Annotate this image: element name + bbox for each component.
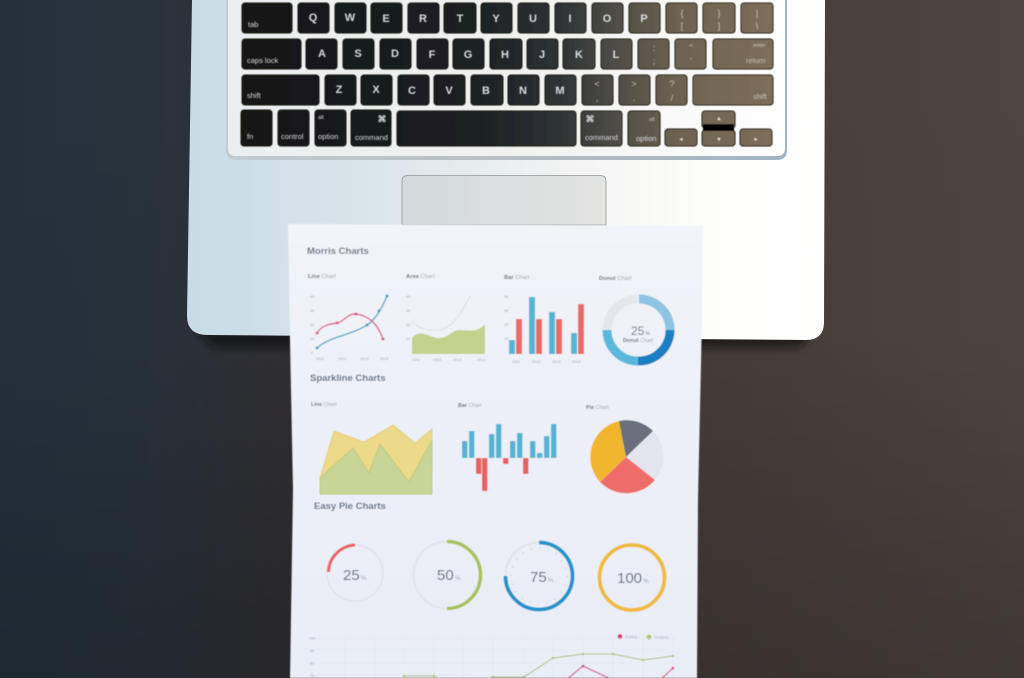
keyboard legends: I: [568, 13, 572, 25]
panel: morris donut chart: [599, 276, 670, 361]
keyboard legends: option: [318, 132, 338, 141]
keyboard legends: J: [539, 49, 545, 61]
keyboard legends: fn: [247, 132, 253, 141]
panel: morris line chart: 2012: [338, 357, 346, 361]
keyboard well edge: [226, 0, 787, 160]
keyboard legends: >: [631, 79, 637, 89]
laptop base: [187, 0, 825, 348]
panel: morris bar chart: 2013: [552, 360, 560, 364]
panel: morris line chart: Line Chart: [308, 274, 336, 280]
panel: morris donut chart: Donut Chart: [599, 276, 632, 282]
panel: morris area chart: 2012: [433, 358, 441, 362]
keyboard legends: S: [354, 48, 362, 60]
keyboard legends: ?: [669, 79, 675, 89]
panel: morris line chart: 0: [311, 351, 313, 355]
gauge: 50 percent: [414, 542, 480, 608]
panel: morris area chart: 20: [406, 323, 410, 327]
panel: morris bar chart: Bar Chart: [504, 275, 530, 281]
keyboard legends: Q: [309, 12, 318, 24]
panel: morris donut chart: 25%: [631, 324, 650, 338]
chart legend: sales and orders: Orders: [654, 635, 669, 641]
laptop body: [187, 0, 825, 340]
panel: morris line chart: 30: [310, 309, 314, 313]
panel: morris line chart: 10: [310, 337, 314, 341]
panel: morris bar chart: 40: [504, 295, 508, 299]
keyboard legends: command: [585, 133, 618, 142]
keyboard legends: L: [613, 49, 620, 61]
keyboard legends: option: [636, 134, 656, 143]
keyboard legends: ▾: [716, 137, 721, 143]
panel: morris bar chart: 10: [504, 337, 508, 341]
panel: sparkline bar chart: Bar Chart: [458, 403, 482, 409]
keyboard well: [228, 0, 785, 156]
keyboard legends: O: [603, 13, 612, 25]
keyboard legends: ◂: [678, 137, 683, 143]
keyboard legends: K: [575, 49, 583, 61]
panel: morris area chart: 2013: [453, 358, 461, 362]
panel: morris bar chart: 20: [504, 323, 508, 327]
keyboard legends: ,: [596, 93, 598, 103]
keyboard legends: X: [372, 84, 380, 96]
line chart: sales and orders: 80: [310, 662, 314, 666]
keyboard legends: ⌘: [378, 114, 386, 124]
keyboard legends: \: [756, 21, 759, 31]
panel: sparkline line chart: Line Chart: [311, 402, 337, 408]
panel: morris area chart: Area Chart: [406, 274, 435, 280]
panel: morris line chart: 40: [310, 295, 314, 299]
heading: Sparkline Charts: Sparkline Charts: [310, 373, 386, 384]
keyboard legends: alt: [318, 115, 324, 121]
panel: morris area chart: 30: [406, 309, 410, 313]
gauge: 50 percent: 50%: [437, 567, 461, 584]
panel: morris bar chart: 30: [504, 309, 508, 313]
keyboard legends: ': [690, 56, 692, 66]
panel: morris line chart: 2013: [360, 357, 368, 361]
panel: sparkline pie chart: [586, 405, 663, 493]
keyboard keys: [241, 3, 773, 146]
line chart: sales and orders: [309, 636, 676, 678]
keyboard legends: ;: [653, 56, 655, 66]
panel: morris line chart: 2011: [316, 357, 324, 361]
keyboard legends: .: [633, 93, 635, 103]
panel: morris line chart: [308, 274, 388, 361]
keyboard legends: T: [457, 13, 464, 25]
keyboard legends: ▴: [716, 116, 721, 122]
keyboard legends: U: [529, 13, 537, 25]
keyboard legends: ": [689, 43, 693, 53]
keyboard legends: A: [318, 48, 326, 60]
keyboard legends: [247, 8, 768, 143]
panel: morris line chart: 20: [310, 323, 314, 327]
panel: morris bar chart: [504, 275, 584, 364]
panel: morris area chart: 40: [406, 295, 410, 299]
heading: Easy Pie Charts: Easy Pie Charts: [314, 501, 386, 512]
keyboard legends: shift: [753, 92, 768, 101]
panel: morris area chart: 2011: [412, 358, 420, 362]
chart legend: sales and orders: [618, 634, 669, 641]
keyboard legends: N: [519, 85, 527, 97]
keyboard legends: }: [717, 8, 721, 18]
keyboard legends: alt: [649, 117, 655, 123]
keyboard legends: enter: [753, 43, 766, 49]
keyboard legends: caps lock: [247, 56, 279, 65]
keyboard legends: shift: [247, 91, 262, 100]
trackpad: [402, 176, 606, 225]
panel: morris bar chart: 2011: [512, 360, 520, 364]
keyboard legends: F: [429, 49, 436, 61]
keyboard legends: E: [382, 13, 390, 25]
keyboard legends: G: [464, 49, 472, 61]
keyboard legends: ⌘: [586, 114, 594, 124]
keyboard legends: control: [281, 132, 304, 141]
keyboard legends: |: [756, 8, 758, 18]
line chart: sales and orders: 70: [310, 674, 314, 678]
keyboard legends: Y: [492, 13, 500, 25]
panel: morris bar chart: 2014: [572, 360, 580, 364]
keyboard legends: H: [501, 49, 509, 61]
keyboard legends: V: [445, 85, 453, 97]
keyboard legends: W: [345, 12, 356, 24]
panel: morris bar chart: 2012: [532, 360, 540, 364]
gauge: 100 percent: [600, 545, 664, 610]
gauge: 100 percent: 100%: [617, 570, 649, 587]
gauge: 75 percent: 75%: [530, 569, 554, 586]
panel: sparkline line chart: [311, 402, 432, 494]
paper sheet: [288, 224, 703, 678]
keyboard legends: P: [640, 13, 648, 25]
keyboard legends: D: [391, 48, 399, 60]
keyboard legends: {: [680, 8, 684, 18]
keyboard legends: ]: [718, 21, 720, 31]
keyboard legends: [: [681, 21, 684, 31]
keyboard legends: R: [419, 13, 427, 25]
line chart: sales and orders: 100: [309, 636, 315, 640]
keyboard legends: :: [653, 43, 655, 53]
keyboard legends: return: [746, 56, 766, 65]
panel: morris donut chart: Donut Chart: [623, 338, 654, 344]
panel: sparkline pie chart: Pie Chart: [586, 405, 609, 411]
keyboard legends: B: [482, 85, 490, 97]
gauge: 25 percent: [327, 545, 383, 601]
keyboard legends: Z: [336, 84, 343, 96]
keyboard legends: C: [408, 85, 416, 97]
panel: morris area chart: 2014: [477, 358, 485, 362]
panel: morris area chart: [406, 274, 485, 362]
gauge: 25 percent: 25%: [343, 567, 367, 584]
panel: sparkline bar chart: [458, 403, 556, 491]
printed report page: [288, 224, 703, 678]
keyboard legends: ▸: [753, 137, 758, 143]
panel: morris area chart: 10: [406, 337, 410, 341]
chart legend: sales and orders: Sales: [625, 634, 638, 640]
keyboard legends: <: [594, 79, 600, 89]
line chart: sales and orders: 90: [310, 649, 314, 653]
keyboard legends: /: [671, 93, 674, 103]
heading: Morris Charts: Morris Charts: [307, 246, 369, 257]
gauge: 75 percent: [506, 542, 572, 610]
keyboard legends: M: [555, 85, 565, 97]
keyboard legends: tab: [248, 20, 258, 29]
panel: morris line chart: 2014: [380, 357, 388, 361]
laptop shadow: [195, 330, 815, 348]
keyboard legends: command: [355, 133, 388, 142]
